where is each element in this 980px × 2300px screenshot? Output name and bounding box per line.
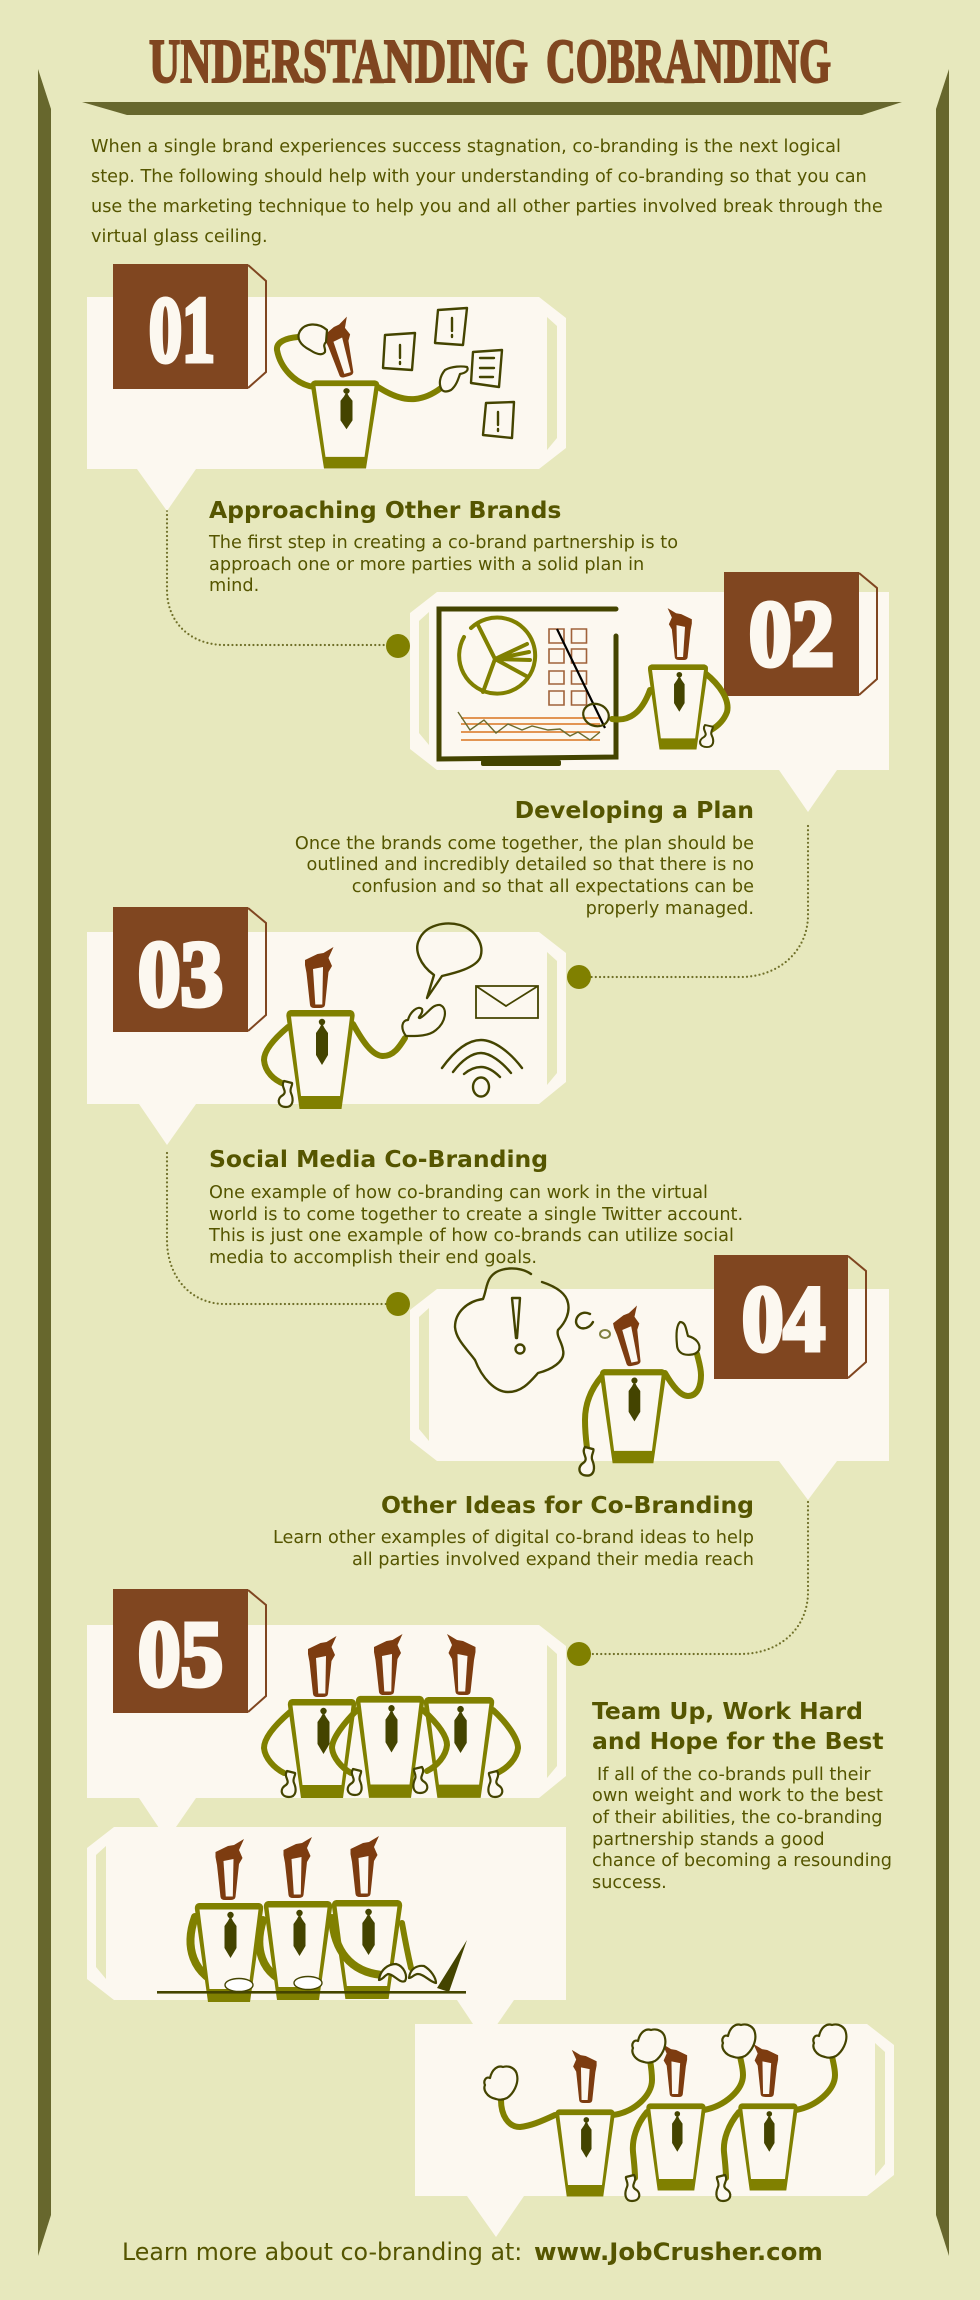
text: step 2: confusion and so that all expectations can be [352,877,754,897]
node dot 2 [386,634,410,658]
connector: step 2 to step 3 [590,826,808,977]
heading: Developing a Plan [515,796,754,824]
panel: team working [87,1827,566,2042]
intro text: virtual glass ceiling. [91,227,268,247]
text: step 3 [208,1145,743,1268]
figures: team at desk [191,1836,436,2002]
intro text: use the marketing technique to help you and all other parties involved break through the [91,197,883,217]
figure: presenter [580,608,728,750]
title: UNDERSTANDING [149,28,528,96]
number badge 01 [113,264,266,389]
panel: step 2 [410,572,889,812]
intro text: When a single brand experiences success stagnation, co-branding is the next logical [91,137,841,157]
panel 3 background [87,932,566,1145]
connector: step 4 to step 5 [590,1502,808,1654]
number badge 02 [724,572,877,696]
text: step 5: of their abilities, the co-branding [592,1808,883,1828]
icon: wifi [442,1040,522,1096]
title underline ribbon [82,102,902,115]
icon: speech bubble [417,924,481,998]
text: step 5: chance of becoming a resounding [592,1851,892,1871]
figure: idea [579,1306,701,1476]
panel: step 5 team standing [87,1589,566,1840]
panel: step 1 [87,264,566,511]
node dot 5 [567,1642,591,1666]
number badge 03 [113,907,266,1032]
panel 4 background [410,1289,889,1500]
icon: sticky notes [383,308,514,438]
left side bar [38,69,51,2256]
figures: team hands on hips [264,1634,518,1798]
text: step 2 [295,796,754,919]
icon: envelope [476,986,538,1018]
panel 1 background [87,297,566,511]
panel 5 background [87,1625,566,1840]
intro text [91,137,883,247]
figure: talker [264,947,445,1109]
right side bar [936,69,949,2256]
number badge 04: 04 [742,1268,825,1371]
intro text: step. The following should help with your understanding of co-branding so that you can [91,167,867,187]
heading: Approaching Other Brands [209,496,561,524]
text: step 2: outlined and incredibly detailed so that there is no [307,855,754,875]
text: step 3: world is to come together to create a single Twitter account. [209,1205,743,1225]
heading: Other Ideas for Co-Branding [381,1491,754,1519]
heading: Team Up, Work Hard [592,1697,863,1725]
panel 6 background [87,1827,566,2042]
footer call to action: www.JobCrusher.com [534,2237,823,2266]
text: step 2: Once the brands come together, the plan should be [295,834,754,854]
footer call to action: Learn more about co-branding at: [122,2238,522,2266]
text: step 4: Learn other examples of digital co-brand ideas to help [273,1528,754,1548]
node dot 4 [386,1292,410,1316]
panel: team celebrating [415,2024,894,2237]
number badge 05 [113,1589,266,1713]
number badge 03: 03 [138,923,223,1026]
text: step 1: The first step in creating a co-brand partnership is to [208,533,678,553]
text: step 5 [592,1697,892,1893]
panel 7 background [415,2024,894,2237]
text: step 4 [273,1491,754,1570]
connector: step 1 to step 2 [167,494,388,645]
text: step 5: own weight and work to the best [592,1786,883,1806]
number badge 02: 02 [749,583,834,686]
text: step 3: One example of how co-branding can work in the virtual [209,1183,708,1203]
panel: step 4 [410,1255,889,1500]
icon: presentation board [439,609,616,766]
panel: step 3 [87,907,566,1145]
figure: presenter with notes [277,317,468,468]
text: step 4: all parties involved expand their media reach [352,1550,754,1570]
footer call to action [122,2237,823,2266]
number badge 01: 01 [149,279,215,382]
text: step 1: approach one or more parties with a solid plan in [209,555,644,575]
text: step 5: If all of the co-brands pull their [597,1765,871,1785]
connector: step 3 to step 4 [167,1153,388,1304]
figures: team cheering [484,2024,846,2201]
text: step 3: media to accomplish their end goals. [209,1248,537,1268]
text: step 5: and Hope for the Best [592,1727,884,1755]
icon: desk and laptop [157,1940,467,1994]
icon: thought cloud [455,1268,610,1392]
text: step 1: mind. [209,576,259,596]
text: step 3: This is just one example of how co-brands can utilize social [208,1226,734,1246]
title: COBRANDING [546,28,831,96]
text: step 2: properly managed. [586,899,754,919]
number badge 05: 05 [138,1603,223,1706]
node dot 3 [567,965,591,989]
text: step 1 [208,496,678,596]
text: step 5: success. [592,1873,667,1893]
panel 2 background [410,592,889,812]
heading: Social Media Co-Branding [209,1145,548,1173]
text: step 5: partnership stands a good [592,1830,825,1850]
number badge 04 [714,1255,866,1379]
